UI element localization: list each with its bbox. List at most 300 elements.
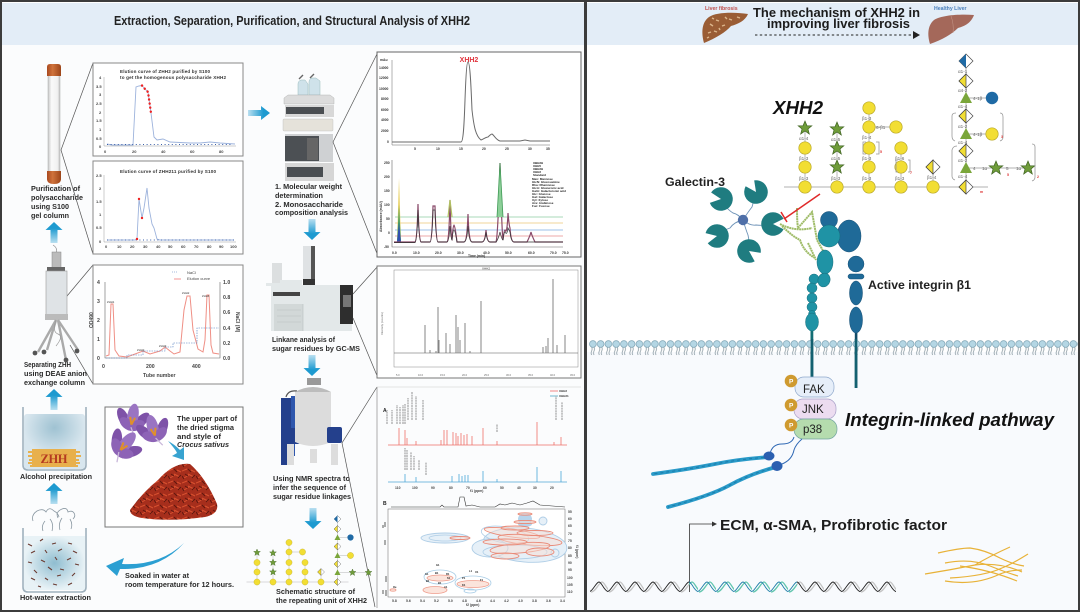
2D HSQC spectrum: S1 bbox=[447, 576, 451, 580]
monosaccharide composition chromatogram: 0.0 bbox=[392, 251, 397, 255]
molecular weight chromatogram: 25 bbox=[505, 147, 509, 151]
arrow: soaking curve bbox=[106, 543, 184, 576]
panel: GC-MS chromatogram: Intensity (counts) bbox=[380, 312, 384, 335]
panel: saffron raw material bbox=[98, 400, 243, 527]
icon: fibrotic liver bbox=[702, 6, 748, 43]
panel: saffron raw material: The upper part of bbox=[177, 416, 238, 423]
icon: fibrotic liver: Liver fibrosis bbox=[705, 6, 738, 12]
icon: HPLC instrument bbox=[283, 74, 334, 181]
label: DEAE: Separating ZHH bbox=[24, 362, 71, 369]
monosaccharide composition chromatogram: 0 bbox=[388, 231, 390, 235]
chart: XHH2 glycan repeating unit: β1-3 bbox=[862, 176, 872, 181]
icon: collagen fibres bbox=[925, 547, 1028, 582]
zoom lines from column to charts bbox=[61, 63, 93, 384]
chart: S100 elution curve of ZHH211: 20 bbox=[130, 244, 135, 249]
2D HSQC spectrum: Oe bbox=[393, 585, 397, 589]
icon: integrin dimer bbox=[806, 212, 864, 388]
molecular weight chromatogram: 30 bbox=[528, 147, 532, 151]
chart: DEAE anion exchange elution: 0.2 bbox=[223, 341, 230, 347]
panel: GC-MS chromatogram: 5.0 bbox=[396, 373, 400, 377]
2D HSQC spectrum: 85 bbox=[568, 554, 572, 558]
2D HSQC spectrum: 4.4 bbox=[490, 599, 495, 603]
chart: XHH2 glycan repeating unit: 3 bbox=[1001, 135, 1003, 139]
chart: DEAE anion exchange elution: 200 bbox=[146, 364, 155, 370]
phosphate markers: P bbox=[789, 402, 794, 410]
icon: alcohol precipitation beaker bbox=[23, 407, 86, 470]
molecular weight chromatogram: 10000 bbox=[379, 87, 389, 91]
chart: XHH2 glycan repeating unit: β1-4 bbox=[927, 175, 937, 180]
chart: S100 elution curve of ZHH211: 2 bbox=[99, 186, 102, 191]
panel: GC-MS chromatogram: 30.0 bbox=[506, 373, 512, 377]
zoom lines GC-MS bbox=[353, 266, 378, 378]
label: purification: Purification of bbox=[31, 186, 81, 193]
chart: XHH2 glycan repeating unit: β1-3 bbox=[799, 176, 809, 181]
13C spectra: 20 bbox=[550, 486, 554, 490]
molecular weight chromatogram: 20 bbox=[482, 147, 486, 151]
chart: XHH2 glycan repeating unit: β1-3 bbox=[895, 176, 905, 181]
panel: GC-MS chromatogram: 10.0 bbox=[418, 373, 424, 377]
2D HSQC spectrum: 75 bbox=[568, 539, 572, 543]
phosphate markers: P bbox=[789, 422, 794, 430]
icon: healthy liver: Healthy Liver bbox=[934, 6, 967, 12]
monosaccharide composition chromatogram: Absorbance (mAU) bbox=[379, 201, 383, 232]
monosaccharide composition chromatogram: GalA: Galacturonic acid bbox=[532, 189, 566, 193]
chart: S100 elution curve of ZHH2: 2 bbox=[99, 110, 102, 115]
2D HSQC spectrum: 3.6 bbox=[546, 599, 551, 603]
chart: DEAE anion exchange elution: ZHH3 bbox=[159, 344, 167, 348]
label: Galectin-3: Galectin-3 bbox=[665, 175, 725, 189]
chart: DEAE anion exchange elution: 0.0 bbox=[223, 356, 230, 362]
panel: GC-MS chromatogram: 15.0 bbox=[440, 373, 446, 377]
chart: XHH2 glycan repeating unit: β1-3 bbox=[799, 156, 809, 161]
2D HSQC spectrum: 3.4 bbox=[560, 599, 565, 603]
label: schematic bbox=[276, 589, 367, 605]
monosaccharide composition chromatogram: 100 bbox=[384, 203, 390, 207]
label: NMR: infer the sequence of bbox=[273, 485, 347, 492]
chart: S100 elution curve of ZHH211: 1.5 bbox=[96, 199, 102, 204]
13C spectra: 70 bbox=[466, 486, 470, 490]
label: HPLC analyses: composition analysis bbox=[275, 210, 348, 217]
chart: XHH2 glycan repeating unit: α1-1 bbox=[958, 69, 968, 74]
2D HSQC spectrum: R1 bbox=[446, 572, 450, 576]
label: soaking: Soaked in water at bbox=[125, 573, 190, 580]
chart: DEAE anion exchange elution: 3 bbox=[97, 299, 100, 305]
chart: XHH2 glycan repeating unit: β1-3 bbox=[862, 116, 872, 121]
chart: S100 elution curve of ZHH211: 50 bbox=[168, 244, 173, 249]
chart: S100 elution curve of ZHH211: 40 bbox=[156, 244, 161, 249]
chart: S100 elution curve of ZHH2 bbox=[93, 63, 243, 156]
monosaccharide composition chromatogram: 20.0 bbox=[435, 251, 442, 255]
molecular weight chromatogram bbox=[379, 57, 550, 151]
2D HSQC spectrum: F1 bbox=[480, 578, 484, 582]
chart: XHH2 glycan repeating unit: 6-β1 bbox=[876, 125, 886, 130]
arrow: GC-MS to NMR bbox=[304, 355, 320, 376]
chart: S100 elution curve of ZHH211: 60 bbox=[181, 244, 186, 249]
chart: S100 elution curve of ZHH2: 0.5 bbox=[96, 136, 102, 141]
panel: GC-MS chromatogram bbox=[377, 266, 581, 378]
icon: DEAE column on tripod bbox=[33, 245, 79, 362]
panel: NMR spectra bbox=[377, 387, 581, 608]
chart: XHH2 glycan repeating unit: 1α bbox=[982, 166, 988, 171]
molecular weight chromatogram: 35 bbox=[546, 147, 550, 151]
13C spectra: XHH2 bbox=[559, 389, 567, 393]
monosaccharide composition chromatogram: 40.0 bbox=[483, 251, 490, 255]
label: hot water: Hot-water extraction bbox=[20, 595, 91, 602]
DNA strand bbox=[590, 581, 896, 593]
monosaccharide composition chromatogram: 70.0 bbox=[550, 251, 557, 255]
2D HSQC spectrum: G1 bbox=[425, 572, 429, 576]
molecular weight chromatogram: 8000 bbox=[381, 97, 389, 101]
label: purification bbox=[31, 186, 83, 220]
kinase complex bbox=[785, 375, 837, 439]
label: schematic: the repeating unit of XHH2 bbox=[276, 598, 367, 605]
chart: S100 elution curve of ZHH2: 3.5 bbox=[96, 84, 102, 89]
monosaccharide composition chromatogram: 50.0 bbox=[505, 251, 512, 255]
13C spectra bbox=[383, 389, 569, 493]
monosaccharide composition chromatogram: 10.0 bbox=[413, 251, 420, 255]
monosaccharide composition chromatogram: GlcA: Glucuronic acid bbox=[532, 186, 564, 190]
monosaccharide composition chromatogram: Glc: Glucose bbox=[532, 192, 551, 196]
monosaccharide composition chromatogram: GlcN: Glucosamine bbox=[532, 180, 560, 184]
molecular weight chromatogram: 12000 bbox=[379, 76, 389, 80]
monosaccharide composition chromatogram: XBH2H bbox=[533, 161, 543, 165]
chart: S100 elution curve of ZHH2: to get the homogenous polysaccharide XHH2 bbox=[120, 75, 226, 80]
2D HSQC spectrum: 4.0 bbox=[518, 599, 523, 603]
chart: XHH2 glycan repeating unit: β1-3 bbox=[831, 176, 841, 181]
arrow: alcohol to DEAE bbox=[46, 389, 62, 410]
2D HSQC spectrum: B1 bbox=[426, 579, 430, 583]
chart: DEAE anion exchange elution: Tube number bbox=[143, 373, 175, 379]
label: HPLC analyses bbox=[275, 184, 348, 217]
molecular weight chromatogram: 10 bbox=[436, 147, 440, 151]
2D HSQC spectrum: f2 (ppm) bbox=[466, 603, 479, 607]
chart: S100 elution curve of ZHH2: Elution curve of ZHH2 purified by S100 bbox=[120, 69, 210, 74]
chart: S100 elution curve of ZHH2: 1.5 bbox=[96, 118, 102, 123]
panel: saffron raw material: the dried stigma bbox=[177, 425, 234, 432]
chart: S100 elution curve of ZHH2: 1 bbox=[99, 127, 102, 132]
icon: healthy liver bbox=[928, 6, 974, 44]
13C spectra: 60 bbox=[483, 486, 487, 490]
chart: XHH2 glycan repeating unit: 1α bbox=[1016, 166, 1022, 171]
chart: S100 elution curve of ZHH211: 2.5 bbox=[96, 173, 102, 178]
2D HSQC spectrum: 95 bbox=[568, 568, 572, 572]
2D HSQC spectrum: 5.4 bbox=[420, 599, 425, 603]
panel: HPLC and monosaccharide charts bbox=[377, 52, 581, 258]
panel: saffron raw material: Crocus sativus bbox=[177, 442, 229, 449]
chart: XHH2 glycan repeating unit: α1-4 bbox=[958, 174, 968, 179]
13C spectra: f1 (ppm) bbox=[470, 489, 483, 493]
chart: S100 elution curve of ZHH211: Elution curve of ZHH211 purified by S100 bbox=[120, 169, 216, 174]
label: DEAE bbox=[24, 362, 87, 387]
label: GC-MS: Linkane analysis of bbox=[272, 337, 336, 344]
2D HSQC spectrum: 90 bbox=[568, 561, 572, 565]
label: HPLC analyses: determination bbox=[275, 193, 323, 200]
right panel title: improving liver fibrosis bbox=[767, 17, 910, 31]
right panel title bbox=[753, 6, 920, 31]
chart: DEAE anion exchange elution: 4 bbox=[97, 280, 100, 286]
label: Active integrin: Active integrin β1 bbox=[868, 278, 971, 292]
13C spectra: 50 bbox=[500, 486, 504, 490]
2D HSQC spectrum: B1 bbox=[435, 571, 439, 575]
chart: S100 elution curve of ZHH211: 0 bbox=[105, 244, 108, 249]
icon: hot water extraction beaker with steam bbox=[23, 508, 86, 592]
molecular weight chromatogram: 0 bbox=[387, 140, 389, 144]
label: soaking bbox=[125, 573, 234, 589]
panel: saffron raw material: and style of bbox=[177, 434, 222, 441]
chart: DEAE anion exchange elution: ZHH4 bbox=[202, 294, 210, 298]
chart: DEAE anion exchange elution: ZHH2 bbox=[137, 348, 145, 352]
monosaccharide composition chromatogram: 50 bbox=[386, 217, 390, 221]
chart: XHH2 glycan repeating unit: α1-2 bbox=[958, 158, 968, 163]
13C spectra: 90 bbox=[431, 486, 435, 490]
label: NMR bbox=[273, 476, 351, 501]
icon: GC-MS instrument bbox=[266, 246, 353, 331]
chart: DEAE anion exchange elution: 0.6 bbox=[223, 310, 230, 316]
monosaccharide composition chromatogram: 200 bbox=[384, 175, 390, 179]
chart: XHH2 glycan repeating unit bbox=[784, 54, 1039, 194]
label: purification: polysaccharide bbox=[31, 195, 83, 202]
arrow: NMR to structure bbox=[304, 508, 322, 529]
2D HSQC spectrum: 110 bbox=[567, 590, 573, 594]
chart: XHH2 glycan repeating unit: α1-5 bbox=[831, 137, 841, 142]
monosaccharide composition chromatogram: 250 bbox=[384, 161, 390, 165]
monosaccharide composition chromatogram: Time (min) bbox=[468, 254, 485, 258]
integrin beta chain bbox=[820, 212, 864, 388]
zoom lines HPLC bbox=[333, 52, 378, 256]
FAK: FAK bbox=[803, 384, 825, 396]
chart: DEAE anion exchange elution: NaCl bbox=[187, 270, 196, 275]
chart: S100 elution curve of ZHH2: 40 bbox=[161, 149, 166, 154]
label: DEAE: using DEAE anion bbox=[24, 371, 87, 378]
label: schematic: Schematic structure of bbox=[276, 589, 356, 596]
monosaccharide composition chromatogram: Rha: Rhamnose bbox=[532, 183, 555, 187]
label: DEAE: exchange column bbox=[24, 380, 85, 387]
icon: S100 gel column bbox=[47, 64, 61, 184]
chart: S100 elution curve of ZHH211: 100 bbox=[230, 244, 237, 249]
monosaccharide composition chromatogram: Xyl: Xylose bbox=[532, 198, 548, 202]
2D HSQC spectrum: 100 bbox=[567, 576, 573, 580]
chart: XHH2 glycan repeating unit: 5 bbox=[1006, 166, 1009, 171]
chart: XHH2 glycan repeating unit: β1-4 bbox=[862, 135, 872, 140]
chart: S100 elution curve of ZHH2: 60 bbox=[190, 149, 195, 154]
monosaccharide composition chromatogram: 75.0 bbox=[562, 251, 569, 255]
chart: DEAE anion exchange elution: Elution curve bbox=[187, 276, 211, 281]
chart: XHH2 glycan repeating unit: m bbox=[980, 190, 983, 194]
chart: XHH2 glycan repeating unit: α1-4 bbox=[958, 104, 968, 109]
chart: XHH2 glycan repeating unit: 5 bbox=[880, 150, 882, 154]
2D HSQC spectrum: 5.8 bbox=[392, 599, 397, 603]
molecular weight chromatogram: 14000 bbox=[379, 66, 389, 70]
chart: S100 elution curve of ZHH2: 80 bbox=[219, 149, 224, 154]
molecular weight chromatogram: 2000 bbox=[381, 129, 389, 133]
13C spectra: 110 bbox=[395, 486, 401, 490]
label: NMR: sugar residue linkages bbox=[273, 494, 351, 501]
2D HSQC spectrum: 5.2 bbox=[434, 599, 439, 603]
arrow: column to HPLC bbox=[248, 106, 270, 120]
chart: S100 elution curve of ZHH211: 80 bbox=[207, 244, 212, 249]
2D HSQC spectrum: B bbox=[383, 501, 387, 507]
molecular weight chromatogram: 4000 bbox=[381, 118, 389, 122]
chart: DEAE anion exchange elution: 0 bbox=[102, 364, 105, 370]
phosphate markers: P bbox=[789, 378, 794, 386]
chart: S100 elution curve of ZHH2: 3 bbox=[99, 92, 102, 97]
chart: S100 elution curve of ZHH211: 70 bbox=[194, 244, 199, 249]
2D HSQC spectrum: 5.0 bbox=[448, 599, 453, 603]
label: HPLC analyses: 2. Monosaccharide bbox=[275, 202, 343, 209]
chart: XHH2 glycan repeating unit: α1-4 bbox=[799, 136, 809, 141]
chart: XHH2 glycan repeating unit: β1-3 bbox=[862, 156, 872, 161]
chart: S100 elution curve of ZHH211: 90 bbox=[219, 244, 224, 249]
chart: DEAE anion exchange elution: NaCl (M) bbox=[234, 312, 240, 333]
phosphate markers bbox=[785, 375, 797, 431]
arrow: extraction to alcohol bbox=[46, 483, 62, 504]
chart: DEAE anion exchange elution: 2 bbox=[97, 318, 100, 324]
label: gene targets: ECM, α-SMA, Profibrotic factor bbox=[720, 518, 947, 534]
2D HSQC spectrum: 60 bbox=[568, 517, 572, 521]
label: purification: gel column bbox=[31, 213, 69, 220]
chart: XHH2 glycan repeating unit: α1-5 bbox=[831, 156, 841, 161]
2D HSQC spectrum: 3.8 bbox=[532, 599, 537, 603]
stalks in front of membrane bbox=[812, 339, 856, 388]
chart: XHH2 glycan repeating unit: α1-4 bbox=[958, 140, 968, 145]
molecular weight chromatogram: 6000 bbox=[381, 108, 389, 112]
label: XHH2: XHH2 bbox=[772, 98, 823, 118]
chart: DEAE anion exchange elution: 1 bbox=[97, 337, 100, 343]
monosaccharide composition chromatogram bbox=[379, 160, 569, 258]
chart: DEAE anion exchange elution: 0.4 bbox=[223, 326, 230, 332]
molecular weight chromatogram: 15 bbox=[459, 147, 463, 151]
chart: DEAE anion exchange elution: OD490 bbox=[89, 312, 95, 328]
arrow: DEAE to purification bbox=[46, 222, 62, 243]
chart: S100 elution curve of ZHH211: 30 bbox=[143, 244, 148, 249]
monosaccharide composition chromatogram: Standard bbox=[533, 173, 546, 177]
p38: p38 bbox=[803, 424, 822, 436]
label: GC-MS bbox=[272, 337, 360, 353]
2D HSQC spectrum: K1 bbox=[462, 583, 466, 587]
arrow: HPLC to GC-MS bbox=[304, 219, 320, 240]
chart: DEAE anion exchange elution bbox=[89, 265, 243, 384]
2D HSQC spectrum: 80 bbox=[568, 546, 572, 550]
2D HSQC spectrum: 5.6 bbox=[406, 599, 411, 603]
arrow: dashed fibrosis to healthy bbox=[755, 31, 920, 39]
13C spectra: 30 bbox=[533, 486, 537, 490]
small schematic glycan structure bbox=[246, 516, 372, 586]
zoom lines NMR bbox=[342, 387, 377, 607]
2D HSQC spectrum: 70 bbox=[568, 532, 572, 536]
monosaccharide composition chromatogram: Fuc: Fucose bbox=[532, 204, 550, 208]
chart: S100 elution curve of ZHH211: 10 bbox=[117, 244, 122, 249]
2D HSQC spectrum: 4.8 bbox=[462, 599, 467, 603]
2D HSQC spectrum bbox=[383, 497, 579, 607]
chart: S100 elution curve of ZHH211: 1 bbox=[99, 212, 102, 217]
monosaccharide composition chromatogram: 60.0 bbox=[528, 251, 535, 255]
2D HSQC spectrum: 4.6 bbox=[476, 599, 481, 603]
chart: DEAE anion exchange elution: ZHH2 bbox=[182, 291, 190, 295]
glycan chains on integrin bbox=[780, 208, 826, 260]
chart: S100 elution curve of ZHH211 bbox=[93, 161, 243, 254]
monosaccharide composition chromatogram: Ara: Arabinose bbox=[532, 201, 554, 205]
2D HSQC spectrum: A1 bbox=[444, 585, 448, 589]
2D HSQC spectrum: 105 bbox=[567, 583, 573, 587]
chart: DEAE anion exchange elution: 0 bbox=[97, 356, 100, 362]
chart: XHH2 glycan repeating unit: 4-1β bbox=[973, 132, 983, 137]
monosaccharide composition chromatogram: XHH2 bbox=[533, 170, 541, 174]
label: GC-MS: sugar residues by GC-MS bbox=[272, 346, 360, 353]
13C spectra: 40 bbox=[517, 486, 521, 490]
chart: S100 elution curve of ZHH2: 4 bbox=[99, 75, 102, 80]
label: Integrin-linked pathway: Integrin-linked pathway bbox=[845, 410, 1055, 430]
2D HSQC spectrum: G1 bbox=[436, 563, 440, 567]
monosaccharide composition chromatogram: Gal: Galactose bbox=[532, 195, 553, 199]
label: HPLC analyses: 1. Molecular weight bbox=[275, 184, 343, 191]
chart: S100 elution curve of ZHH211: 0 bbox=[99, 239, 102, 244]
monosaccharide composition chromatogram: 150 bbox=[384, 189, 390, 193]
2D HSQC spectrum: 55 bbox=[568, 510, 572, 514]
13C spectra: 100 bbox=[412, 486, 418, 490]
monosaccharide composition chromatogram: -50 bbox=[384, 245, 389, 249]
chart: DEAE anion exchange elution: 1.0 bbox=[223, 280, 230, 286]
13C spectra: XHH21 bbox=[559, 394, 569, 398]
13C spectra: A bbox=[383, 408, 387, 414]
icon: NMR spectrometer bbox=[281, 378, 342, 465]
monosaccharide composition chromatogram: Man: Mannose bbox=[532, 177, 553, 181]
molecular weight chromatogram: XHH2 bbox=[460, 57, 478, 64]
chart: XHH2 glycan repeating unit: 4-1β bbox=[973, 96, 983, 101]
label: NMR: Using NMR spectra to bbox=[273, 476, 350, 483]
2D HSQC spectrum: 4.2 bbox=[504, 599, 509, 603]
chart: XHH2 glycan repeating unit: β1-6 bbox=[895, 156, 905, 161]
chart: S100 elution curve of ZHH211: 0.5 bbox=[96, 225, 102, 230]
label: purification: using S100 bbox=[31, 204, 69, 211]
JNK: JNK bbox=[802, 404, 824, 416]
label: soaking: room temperature for 12 hours. bbox=[125, 582, 234, 589]
right panel title: The mechanism of XHH2 in bbox=[753, 6, 920, 20]
cell membrane bbox=[589, 339, 1078, 356]
chart: S100 elution curve of ZHH2: 0 bbox=[104, 149, 107, 154]
chart: XHH2 glycan repeating unit: 2 bbox=[1037, 175, 1039, 179]
integrin alpha chain bbox=[806, 225, 840, 378]
chart: XHH2 glycan repeating unit: α4-2 bbox=[958, 88, 968, 93]
2D HSQC spectrum: L1 bbox=[469, 569, 473, 573]
molecular weight chromatogram: 5 bbox=[414, 147, 416, 151]
panel: GC-MS chromatogram: 45.0 bbox=[570, 373, 576, 377]
panel: GC-MS chromatogram: 35.0 bbox=[528, 373, 534, 377]
monosaccharide composition chromatogram: XHH5 bbox=[533, 164, 541, 168]
2D HSQC spectrum: P1 bbox=[462, 576, 466, 580]
chart: XHH2 glycan repeating unit: α1-2 bbox=[958, 124, 968, 129]
2D HSQC spectrum: 65 bbox=[568, 524, 572, 528]
label: alcohol: Alcohol precipitation bbox=[20, 474, 92, 481]
chart: XHH2 glycan repeating unit: 7 bbox=[910, 171, 912, 175]
molecular weight chromatogram: mAu bbox=[380, 58, 388, 62]
chart: S100 elution curve of ZHH2: 0 bbox=[99, 144, 102, 149]
left panel title: Extraction, Separation, Purification, and Structural Analysis of XHH2 bbox=[114, 13, 470, 28]
13C spectra: 80 bbox=[449, 486, 453, 490]
2D HSQC spectrum: f1 (ppm) bbox=[575, 545, 579, 558]
2D HSQC spectrum: B1 bbox=[438, 581, 442, 585]
panel: GC-MS chromatogram: 40.0 bbox=[550, 373, 556, 377]
chart: S100 elution curve of ZHH2: 20 bbox=[132, 149, 137, 154]
chart: XHH2 glycan repeating unit: 5 bbox=[1007, 173, 1009, 177]
monosaccharide composition chromatogram: XBH2H bbox=[533, 167, 543, 171]
arrow: transcription start bbox=[690, 522, 717, 592]
icon: myosin filaments bbox=[653, 437, 802, 507]
icon: Galectin-3 pentamer bbox=[704, 177, 784, 267]
inhibition line bbox=[781, 194, 820, 222]
chart: S100 elution curve of ZHH2: 2.5 bbox=[96, 101, 102, 106]
chart: DEAE anion exchange elution: ZHH1 bbox=[107, 300, 115, 304]
panel: GC-MS chromatogram: XHH2 bbox=[482, 266, 490, 270]
